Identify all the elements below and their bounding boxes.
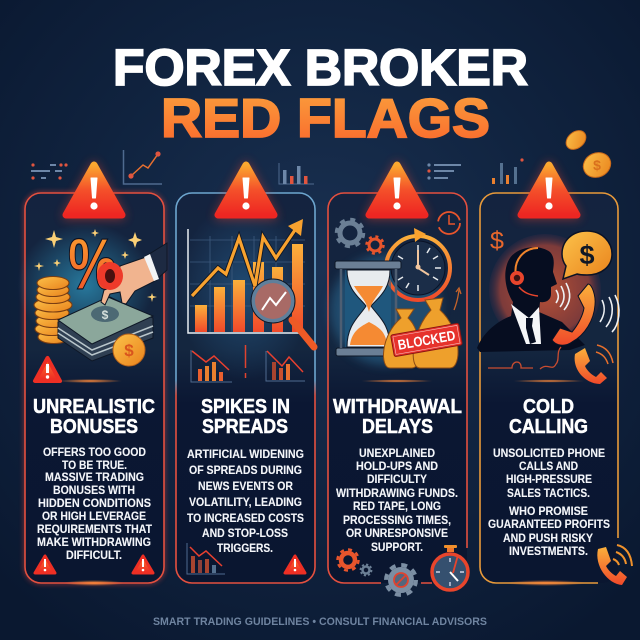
illustration: percent sign, money and hand: [17, 223, 167, 383]
description: TO INCREASED COSTS: [187, 511, 304, 525]
chart: spreads bars and spike line: [188, 219, 305, 333]
icon: warning triangle: [369, 165, 425, 216]
description: REQUIREMENTS THAT: [37, 522, 152, 536]
heading: [33, 395, 155, 438]
panel: unrealistic bonuses: [17, 165, 167, 586]
description: AND PUSH RISKY: [503, 531, 593, 545]
description: SUPPORT.: [371, 540, 423, 554]
hand with sleeve: [97, 243, 167, 305]
icon: phone: [575, 345, 613, 384]
icon: small warning triangle: [35, 358, 60, 381]
panel frame: [176, 193, 315, 583]
footer: SMART TRADING GUIDELINES • CONSULT FINANCIAL ADVISORS: [153, 616, 487, 628]
title: FOREX BROKER: [113, 39, 528, 96]
panel frame: [480, 193, 618, 583]
panel: spikes in spreads: [176, 165, 315, 583]
gold coin: [113, 334, 145, 366]
description: [187, 447, 304, 555]
description: OR UNRESPONSIVE: [346, 526, 448, 540]
description: [37, 445, 152, 562]
icon: warning triangle: [66, 165, 122, 216]
coin stack: [34, 276, 72, 344]
description: BONUSES WITH: [53, 483, 135, 497]
description: HOLD-UPS AND: [356, 459, 438, 473]
description: OR HIGH LEVERAGE: [42, 509, 146, 523]
falling coins: $: [593, 157, 601, 173]
description: GUARANTEED PROFITS: [488, 517, 610, 531]
description: [336, 446, 458, 554]
heading: [509, 395, 588, 438]
icon: warning triangle: [521, 165, 577, 216]
heading: BONUSES: [50, 415, 138, 438]
squiggle cord: [488, 347, 561, 369]
heading: [333, 395, 462, 438]
panel frame: [328, 193, 467, 583]
description: SALES TACTICS.: [507, 486, 590, 500]
illustration: telemarketer silhouette with phone: [477, 227, 619, 384]
decorative mini chart: top centre: [279, 163, 314, 184]
illustration: telemarketer silhouette with phone: $: [490, 227, 504, 255]
panel frame: [25, 193, 164, 583]
description: INVESTMENTS.: [509, 544, 588, 558]
blocked stamp: BLOCKED: [397, 327, 456, 353]
heading: DELAYS: [362, 415, 433, 438]
description: OF SPREADS DURING: [189, 463, 302, 477]
money bags: [384, 298, 458, 368]
icon: phone, bottom: [597, 545, 632, 585]
title: [113, 39, 528, 149]
heading: CALLING: [509, 415, 588, 438]
heading: SPREADS: [202, 415, 288, 438]
description: WITHDRAWING FUNDS.: [336, 486, 458, 500]
headset: [510, 248, 538, 296]
description: OFFERS TOO GOOD: [43, 445, 146, 459]
description: DIFFICULT.: [66, 548, 122, 562]
sparkles: [34, 229, 157, 302]
description: PROCESSING TIMES,: [343, 513, 451, 527]
hourglass: [335, 261, 401, 356]
decorative mini chart: top left: [31, 150, 162, 184]
description: WHO PROMISE: [509, 504, 588, 518]
heading: UNREALISTIC: [33, 395, 155, 418]
cash stack: $: [102, 308, 109, 322]
phone handset: [552, 284, 595, 345]
panel: withdrawal delays: [328, 165, 468, 595]
description: VOLATILITY, LEADING: [189, 495, 302, 509]
description: DIFFICULTY: [367, 472, 427, 486]
description: MAKE WITHDRAWING: [37, 535, 151, 549]
silhouette: [477, 247, 585, 352]
description: RED TAPE, LONG: [353, 499, 441, 513]
falling coins: [562, 127, 615, 182]
small clock: [438, 212, 460, 234]
mini chart and warning triangle, bottom: [187, 543, 305, 574]
mini charts below main chart: [191, 345, 305, 382]
heading: [201, 395, 290, 438]
icon: magnifying glass: [251, 279, 314, 347]
percent sign: %: [68, 225, 117, 305]
description: AND STOP-LOSS: [202, 526, 288, 540]
icons: gears and stopwatch, bottom: [338, 545, 468, 595]
description: HIDDEN CONDITIONS: [38, 496, 151, 510]
heading: SPIKES IN: [201, 395, 290, 418]
gold coin: $: [124, 341, 134, 360]
heading: WITHDRAWAL: [333, 395, 462, 418]
sound waves: [556, 283, 619, 332]
speech bubble with dollar: $: [579, 240, 595, 270]
description: HIGH-PRESSURE: [506, 472, 592, 486]
icon: warning triangle: [218, 165, 274, 216]
cash stack: [58, 297, 153, 361]
description: UNEXPLAINED: [359, 446, 435, 460]
heading: COLD: [523, 395, 574, 418]
description: TO BE TRUE.: [62, 458, 127, 472]
title: RED FLAGS: [161, 87, 490, 149]
decorative mini chart: top of panel four: [492, 158, 524, 184]
speech bubble with dollar: [562, 231, 612, 279]
description: TRIGGERS.: [217, 541, 273, 555]
gears: [336, 220, 384, 254]
description: NEWS EVENTS OR: [198, 479, 293, 493]
description: UNSOLICITED PHONE: [493, 446, 605, 460]
description: [488, 446, 610, 558]
description: CALLS AND: [519, 459, 578, 473]
illustration: gears, clock, hourglass, money bags: [330, 212, 462, 368]
description: ARTIFICIAL WIDENING: [187, 447, 304, 461]
icon: bottom warning triangles: [35, 556, 153, 573]
description: MASSIVE TRADING: [45, 470, 144, 484]
clock with arrow: [386, 228, 450, 300]
decorative list: top of panel three: [427, 163, 461, 180]
panel: cold calling: [477, 165, 632, 586]
